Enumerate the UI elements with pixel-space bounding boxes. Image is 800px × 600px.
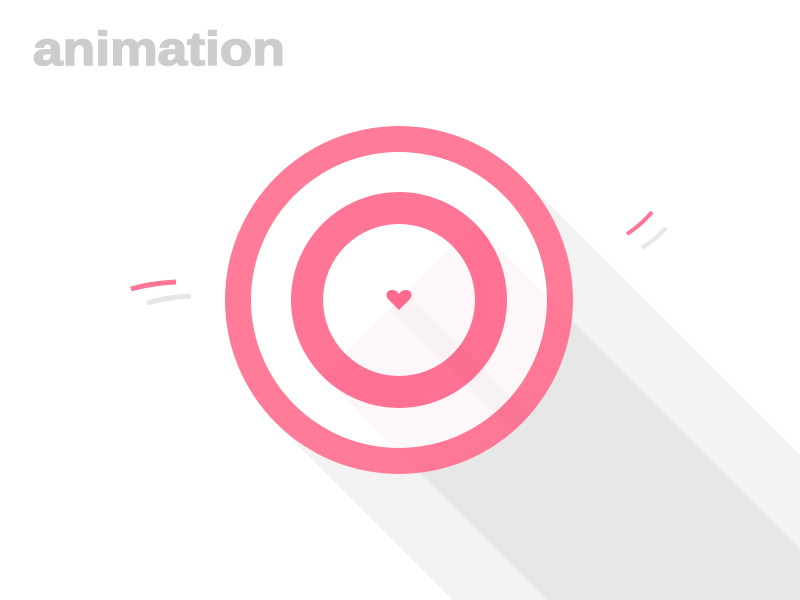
long shadow: outer ring (276, 177, 800, 600)
target: outer ring (225, 126, 573, 474)
motion dashes left (131, 282, 191, 303)
motion dashes right (627, 212, 666, 248)
target: inner ring (291, 192, 507, 408)
icon: heart (386, 290, 412, 310)
long shadow: inner ring (323, 224, 800, 600)
title: animation (33, 22, 285, 75)
inner shadow overlay on rings (391, 296, 512, 412)
target (225, 126, 573, 474)
